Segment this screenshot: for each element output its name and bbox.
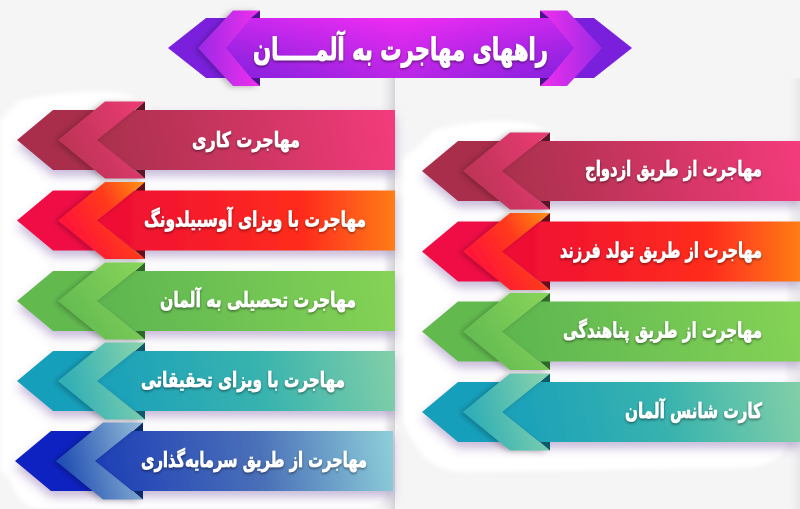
arrow: marriage migration (422, 132, 800, 210)
title back arrows (168, 18, 632, 78)
arrow: Ausbildung visa (17, 182, 395, 259)
right column of arrows (422, 132, 800, 450)
arrow: research visa (17, 342, 395, 420)
arrow: child birth migration (422, 213, 800, 290)
arrow: work migration (17, 102, 395, 178)
arrow: study migration: مهاجرت تحصیلی به آلمان (160, 287, 356, 312)
arrow: research visa: مهاجرت با ویزای تحقیقاتی (141, 368, 345, 392)
title chevrons (198, 10, 602, 86)
arrow: Ausbildung visa: مهاجرت با ویزای آوسبیلدونگ (144, 206, 366, 232)
arrow: work migration: مهاجرت کاری (192, 128, 300, 152)
arrow: investment migration: مهاجرت از طریق سرمایه‌گذاری (141, 447, 367, 472)
title band (226, 18, 574, 78)
arrow: investment migration (15, 422, 393, 500)
arrow: asylum migration (422, 293, 800, 370)
title banner (168, 10, 632, 86)
arrow: chance card (422, 374, 800, 450)
left column of arrows (15, 102, 395, 500)
title text: راههای مهاجرت به آلمـــــان (253, 30, 548, 68)
arrow: study migration (17, 262, 395, 340)
